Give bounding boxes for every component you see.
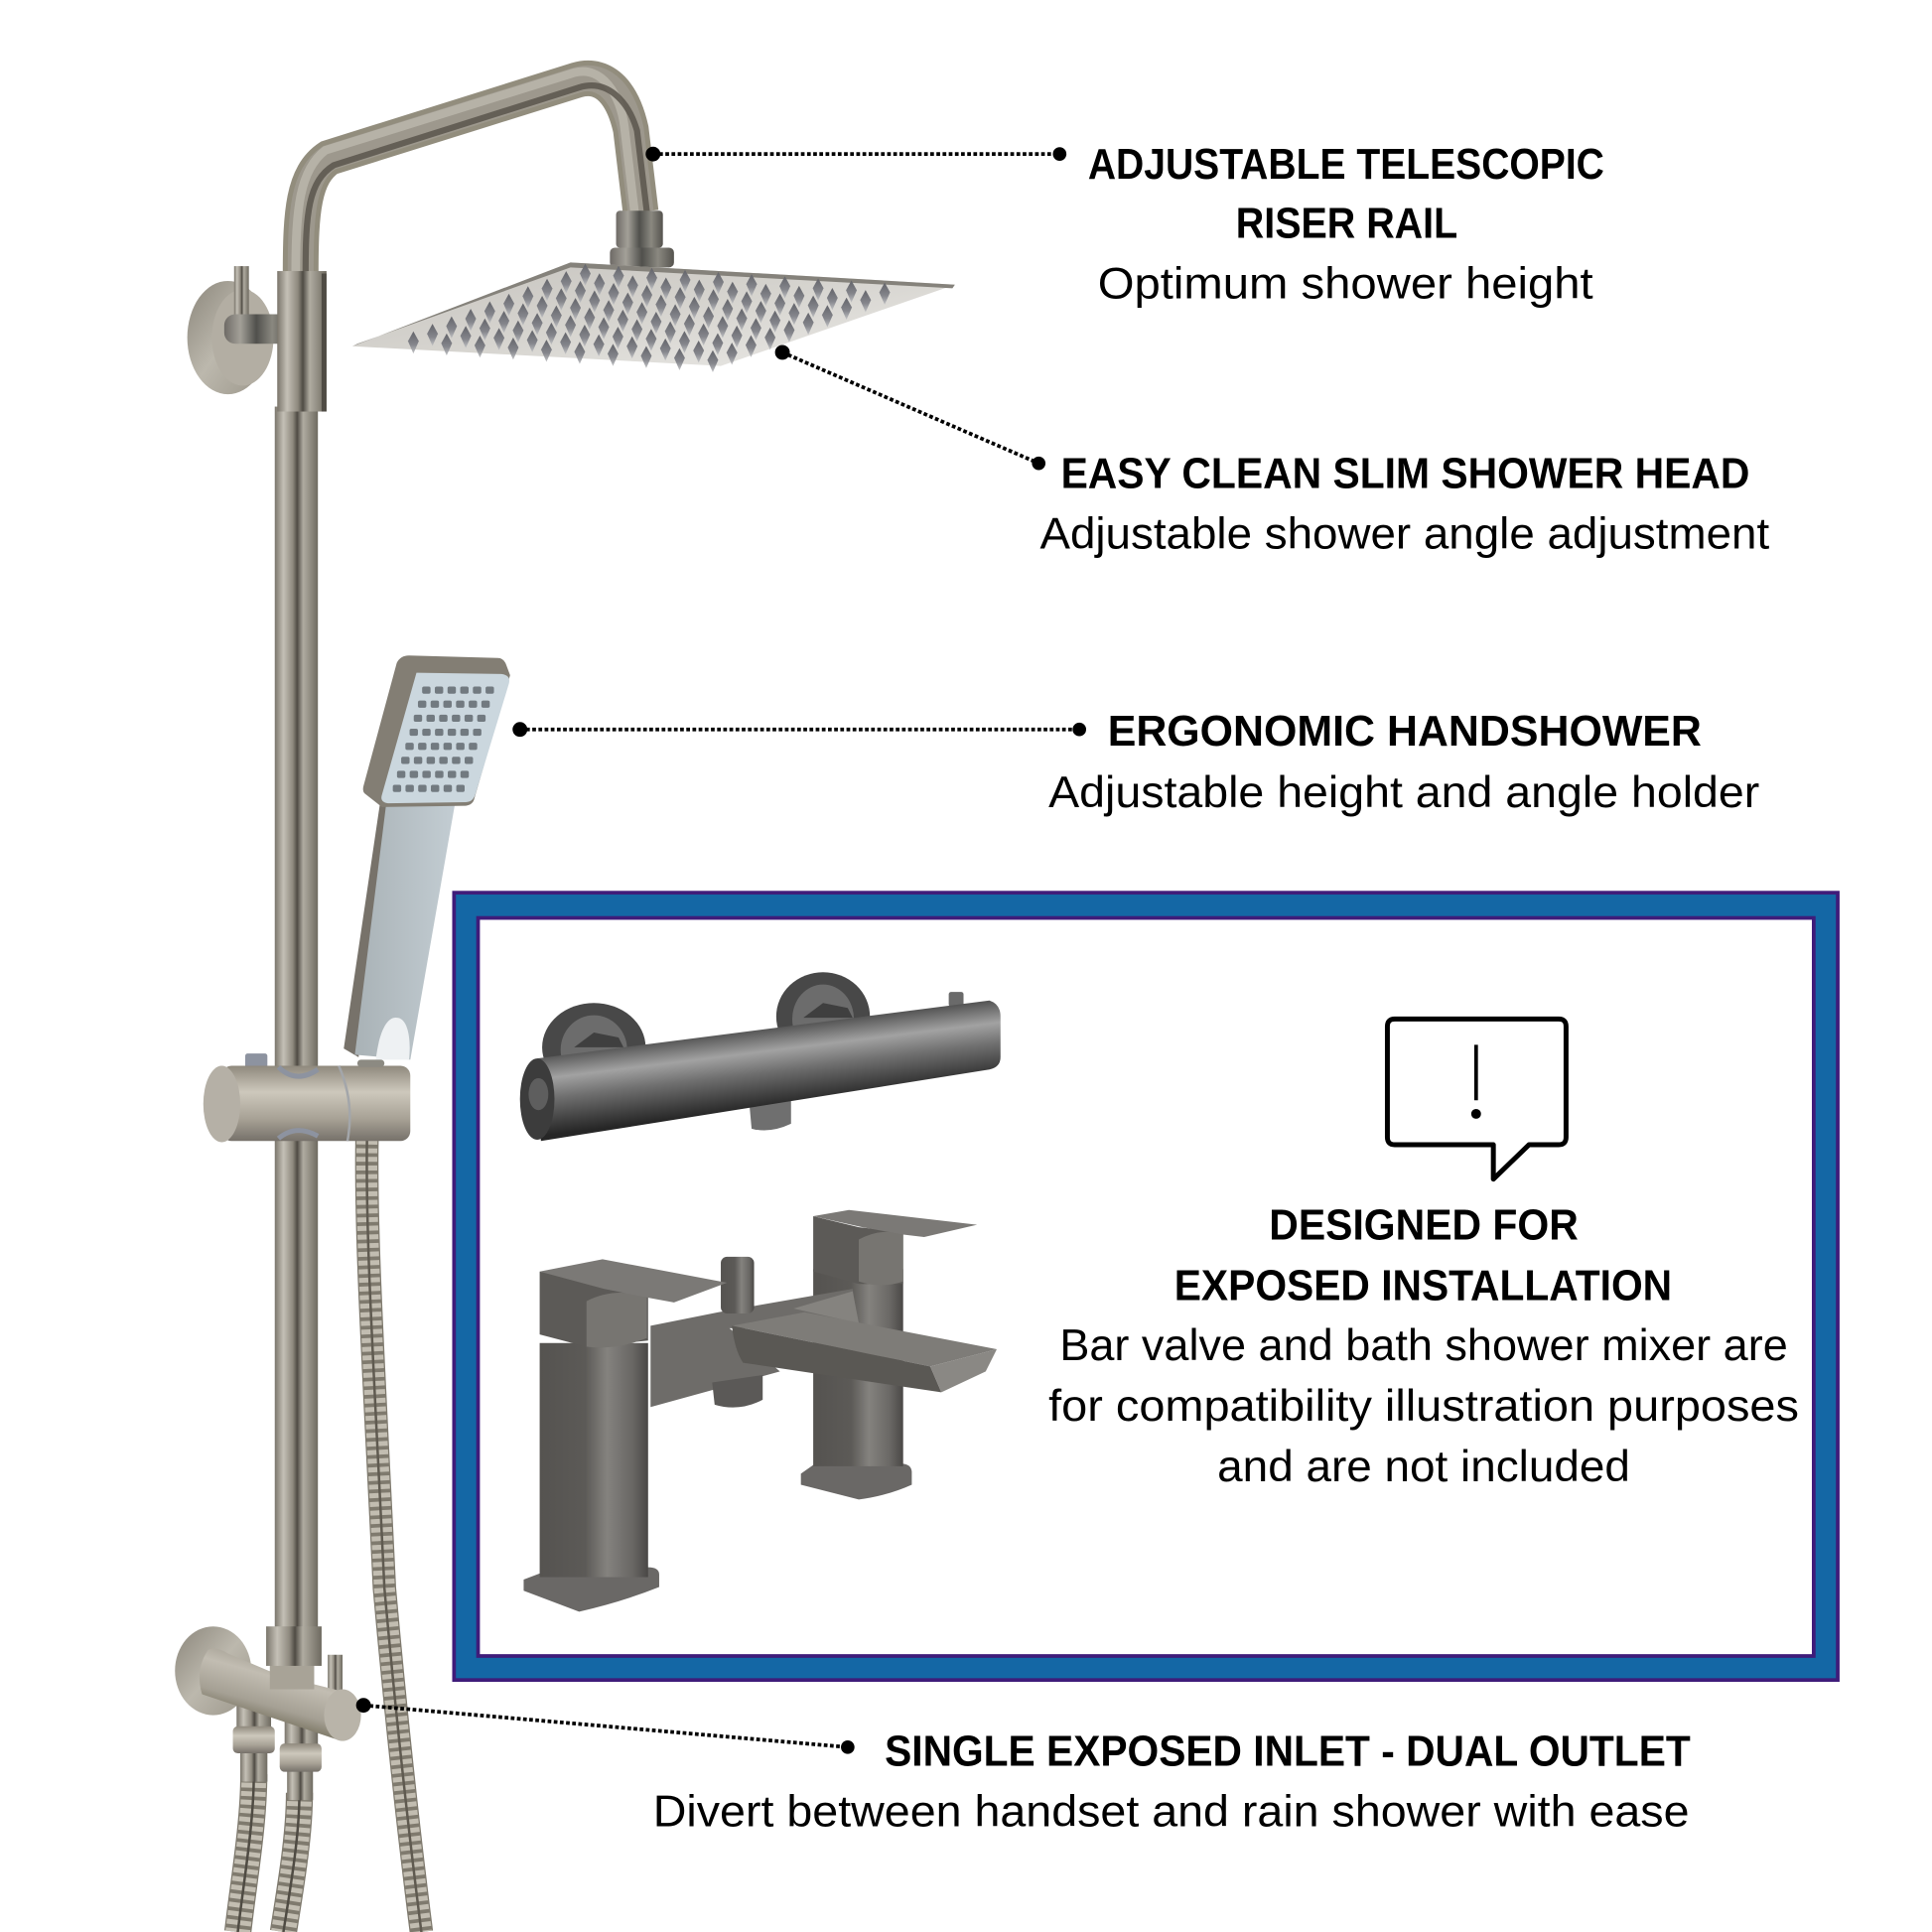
callout text: riser rail: Optimum shower height <box>1098 259 1593 308</box>
callout text: shower head <box>1039 450 1770 558</box>
panel text: and are not included <box>1217 1443 1630 1491</box>
callout text: shower head: EASY CLEAN SLIM SHOWER HEAD <box>1061 450 1749 497</box>
bridge and spout <box>650 1289 859 1407</box>
bar valve illustration <box>520 972 1001 1141</box>
left column <box>523 1568 659 1611</box>
shower arm joint <box>610 210 674 267</box>
nozzles <box>408 264 891 372</box>
diverter knob <box>721 1257 755 1313</box>
illustration: riser shower system <box>175 71 955 1932</box>
panel text: DESIGNED FOR <box>1269 1202 1579 1250</box>
panel text: EXPOSED INSTALLATION <box>1174 1262 1672 1310</box>
callout connector: shower head <box>775 345 1045 470</box>
panel text <box>1048 1202 1799 1491</box>
top wall bracket <box>188 266 327 412</box>
right column <box>801 1463 911 1499</box>
callout text: riser rail <box>1088 141 1604 308</box>
handshower <box>344 655 510 1059</box>
panel text: Bar valve and bath shower mixer are <box>1059 1321 1788 1370</box>
callout text: handshower: ERGONOMIC HANDSHOWER <box>1108 708 1702 756</box>
icon: speech bubble with exclamation mark <box>1387 1019 1566 1179</box>
callout text: handshower: Adjustable height and angle holder <box>1048 768 1759 817</box>
callout connector: riser rail <box>645 147 1066 162</box>
panel: exposed installation <box>454 893 1838 1680</box>
callout text: riser rail: RISER RAIL <box>1236 201 1457 248</box>
sliding hose <box>366 1131 421 1932</box>
outlet hoses <box>238 1774 300 1932</box>
panel text: for compatibility illustration purposes <box>1048 1382 1799 1431</box>
callout text: shower head: Adjustable shower angle adjustment <box>1039 509 1770 558</box>
callout text: riser rail: ADJUSTABLE TELESCOPIC <box>1088 141 1604 189</box>
jets <box>393 687 494 792</box>
overhead arm <box>296 71 647 274</box>
callout connector: handshower <box>512 722 1086 737</box>
rain shower head <box>352 262 955 372</box>
callout connector: inlet <box>356 1698 855 1754</box>
callout text: inlet <box>653 1727 1691 1836</box>
slider clamp <box>204 1053 410 1142</box>
inlet elbow and diverter <box>175 1626 361 1800</box>
callout text: inlet: SINGLE EXPOSED INLET - DUAL OUTLET <box>885 1727 1691 1775</box>
callout text: inlet: Divert between handset and rain shower with ease <box>653 1787 1690 1836</box>
riser rail <box>275 407 318 1639</box>
callout text: handshower <box>1048 708 1759 817</box>
bath shower mixer illustration <box>523 1210 997 1611</box>
